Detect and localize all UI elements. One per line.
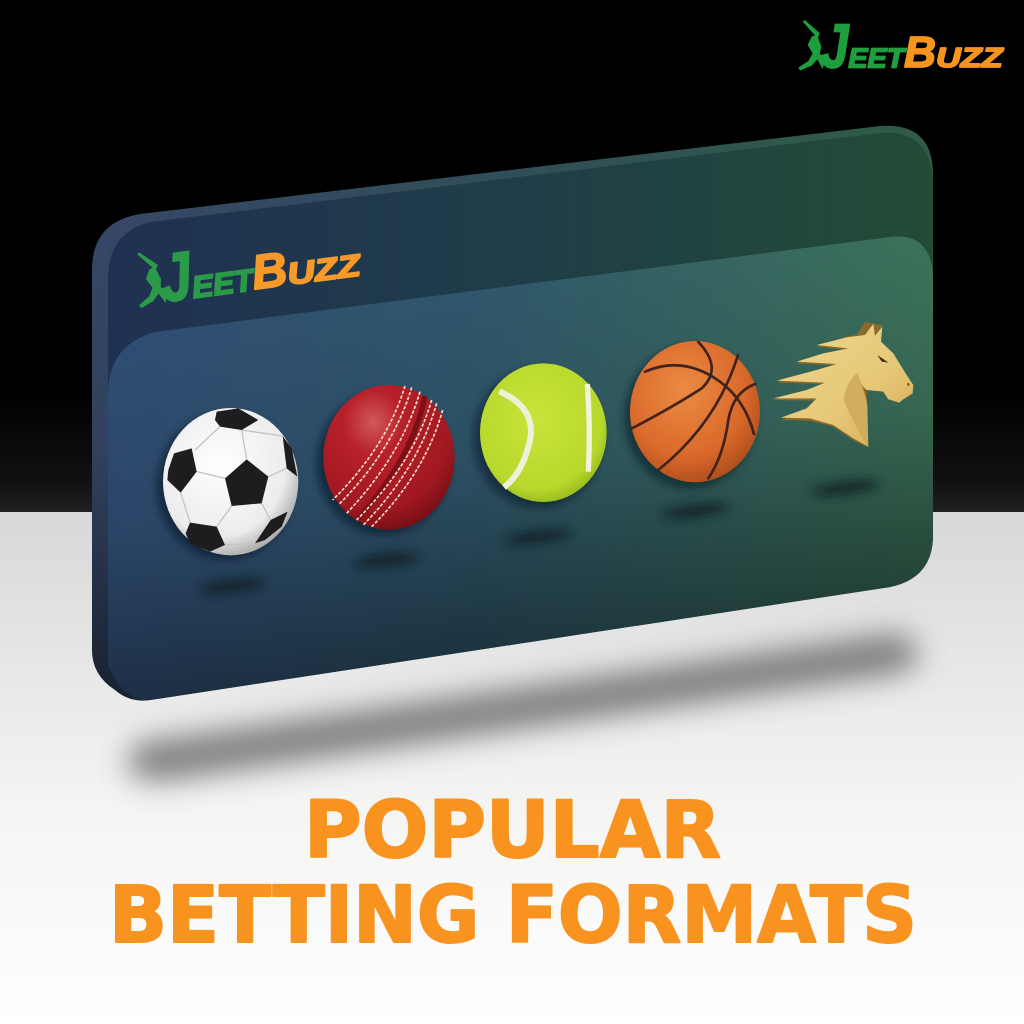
- background: dark upper wall: [0, 0, 1024, 512]
- logo wordmark: UZZ: [936, 42, 1004, 73]
- title: [109, 786, 917, 961]
- horse eye: [877, 355, 889, 363]
- top-right logo: [798, 13, 1004, 82]
- card back face: [108, 133, 933, 700]
- shadow: cricket: [353, 549, 421, 571]
- logo wordmark: EET: [190, 262, 258, 305]
- ball shadows on panel: [197, 477, 880, 597]
- title line 1: POPULAR: [304, 786, 721, 876]
- shadow: horse: [810, 477, 880, 499]
- front panel shading: [108, 237, 933, 700]
- icon: cricket batsman: [798, 20, 825, 71]
- shadow: soccer: [197, 575, 267, 597]
- card logo: [131, 215, 365, 320]
- horse neck shading: [844, 373, 868, 447]
- icon: soccer ball: [157, 408, 298, 560]
- icon: tennis ball: [473, 363, 607, 508]
- shadow: basketball: [660, 500, 730, 522]
- logo wordmark: EET: [848, 43, 907, 74]
- logo wordmark: UZZ: [285, 247, 364, 292]
- horse silhouette: [773, 324, 913, 447]
- icon: cricket ball: [317, 385, 455, 535]
- icon: horse head: [773, 322, 913, 447]
- card: [92, 126, 933, 701]
- title line 2: BETTING FORMATS: [109, 871, 917, 961]
- card edge fade: [92, 126, 933, 701]
- background: light floor: [0, 512, 1024, 1024]
- logo wordmark: J: [821, 13, 850, 82]
- logo wordmark: B: [904, 28, 936, 77]
- logo wordmark: J: [155, 237, 198, 317]
- icon: cricket batsman: [132, 250, 168, 309]
- shadow: tennis: [503, 526, 573, 548]
- logo wordmark: B: [248, 242, 290, 300]
- horse nostril: [907, 383, 910, 386]
- front panel: [108, 237, 933, 700]
- icon: basketball: [624, 341, 760, 489]
- card edge bevel: [92, 126, 933, 701]
- horse dark extrusion: [773, 322, 882, 447]
- floor shadow under card: [128, 634, 917, 781]
